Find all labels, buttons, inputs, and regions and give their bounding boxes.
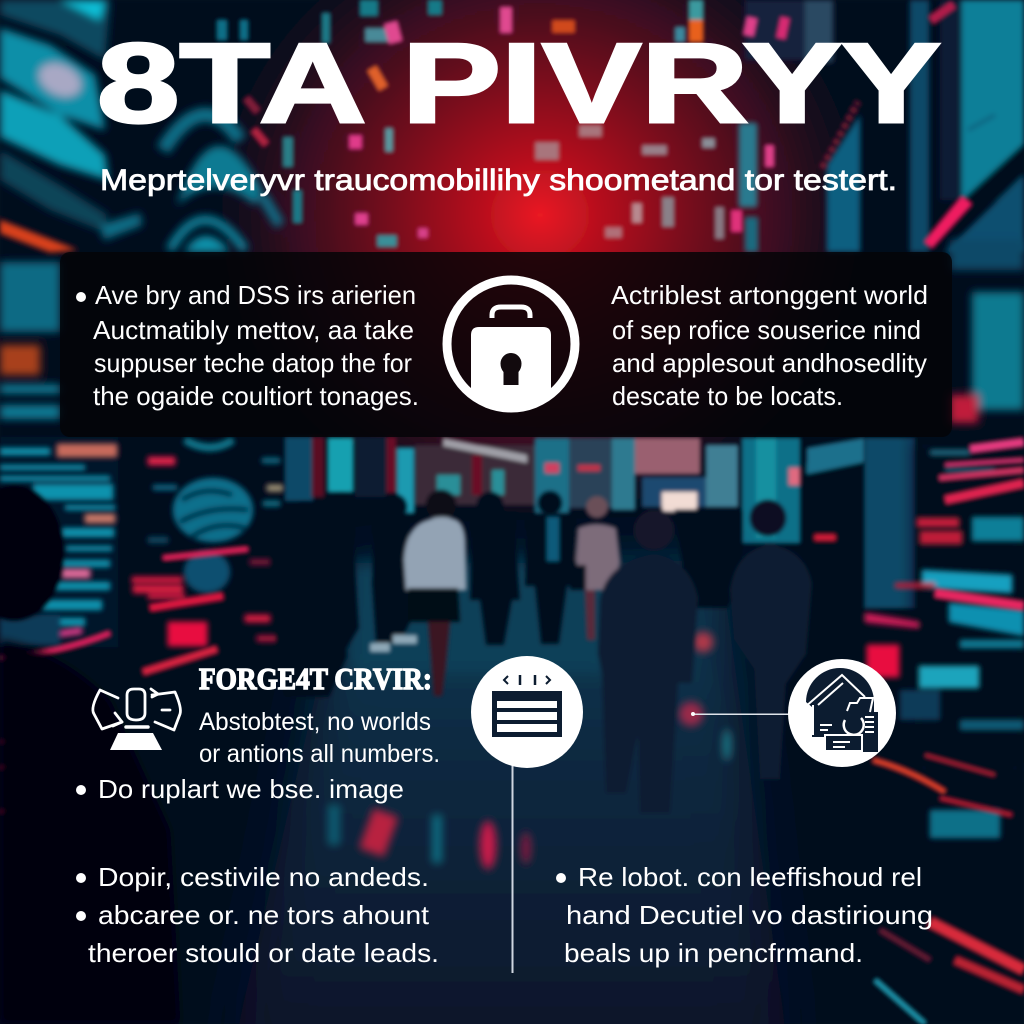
text block: forge description: Abstobtest, no worlds [199,708,431,736]
icon: table list with connector [471,656,583,973]
icon: padlock [447,280,575,408]
bullets: lower left: abcaree or. ne tors ahount [98,900,430,930]
left text block [76,280,419,411]
bullets: lower right: Re lobot. con leeffishoud rel [578,862,922,892]
text block: forge description [199,708,440,768]
right text block [611,280,928,411]
icon: outline camera [93,689,180,750]
title: 8TA PIVRYY [97,20,941,146]
left text block: the ogaide coultiort tonages. [93,381,419,411]
bullets: lower right: beals up in pencfrmand. [564,938,863,968]
mid left streak wall [0,437,118,658]
panel side areas [0,240,1024,423]
subtitle: Meprtelveryvr traucomobillihy shoometand tor testert. [100,164,897,197]
text block: forge description: or antions all numbers. [199,740,440,768]
bullets: lower right [556,862,933,968]
bullets: lower left: theroer stould or date leads. [88,938,439,968]
crowd silhouettes [0,485,812,1024]
icon: house and cards with connector [691,659,896,767]
bullet: image: Do ruplart we bse. image [98,774,404,804]
lower scene glows [0,632,731,869]
bullets: lower left [76,862,439,968]
floor [230,560,790,1024]
corridor backdrop [230,437,915,1024]
left text block: Ave bry and DSS irs arierien [95,280,416,310]
right text block: Actriblest artonggent world [611,280,928,310]
left text block: Auctmatibly mettov, aa take [93,315,414,345]
heading: forge: FORGE4T CRVIR: [199,661,432,696]
top left cyan bands and arcs [0,0,512,252]
mid globe mural [132,440,283,672]
right text block: and applesout andhosedlity [612,348,927,378]
bullets: lower right: hand Decutiel vo dastirioung [566,900,933,930]
bullets: lower left: Dopir, cestivile no andeds. [98,862,429,892]
right text block: descate to be locats. [612,381,843,411]
right text block: of sep rofice souserice nind [612,315,921,345]
panel: security summary [60,252,952,437]
right streak wall [865,437,1024,1024]
left text block: suppuser teche datop the for [94,348,412,378]
top right columns and lights [535,0,1024,252]
